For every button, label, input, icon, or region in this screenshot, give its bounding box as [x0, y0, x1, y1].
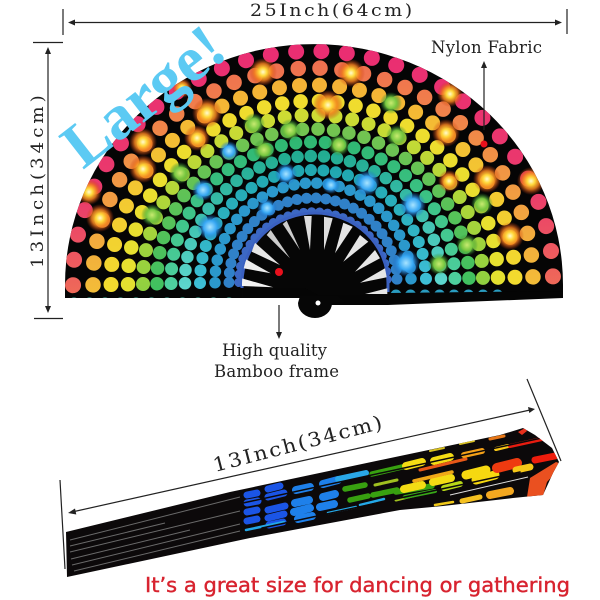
- orange red tip: [527, 462, 559, 497]
- width label: 25Inch(64cm): [250, 1, 412, 21]
- open fan: [65, 44, 563, 318]
- stick highlights: [70, 497, 240, 571]
- glowing lights: [76, 58, 545, 277]
- fan fabric: [65, 44, 563, 298]
- caption: It’s a great size for dancing or gathering: [145, 573, 570, 597]
- rainbow dot rings: [69, 47, 553, 304]
- Bamboo frame callout: Bamboo frame: [214, 362, 339, 381]
- Bamboo frame callout: High quality: [222, 341, 328, 360]
- closed length label: 13Inch(34cm): [210, 411, 384, 477]
- closed fan body: [66, 428, 559, 577]
- coloured fabric folds: [243, 428, 560, 530]
- height dimension line: [33, 42, 63, 318]
- Large label: Large!: [48, 11, 238, 181]
- pivot knob: [298, 296, 345, 318]
- width dimension line: [63, 9, 567, 35]
- closed fan: [66, 428, 560, 577]
- height label: 13Inch(34cm): [29, 95, 48, 268]
- Bamboo frame callout: [214, 268, 339, 381]
- Nylon Fabric callout: [431, 38, 542, 148]
- Nylon Fabric callout: Nylon Fabric: [431, 38, 542, 57]
- closed length dimension: [60, 379, 561, 569]
- bamboo hub: [242, 213, 388, 298]
- bottom guard stick: [243, 288, 563, 305]
